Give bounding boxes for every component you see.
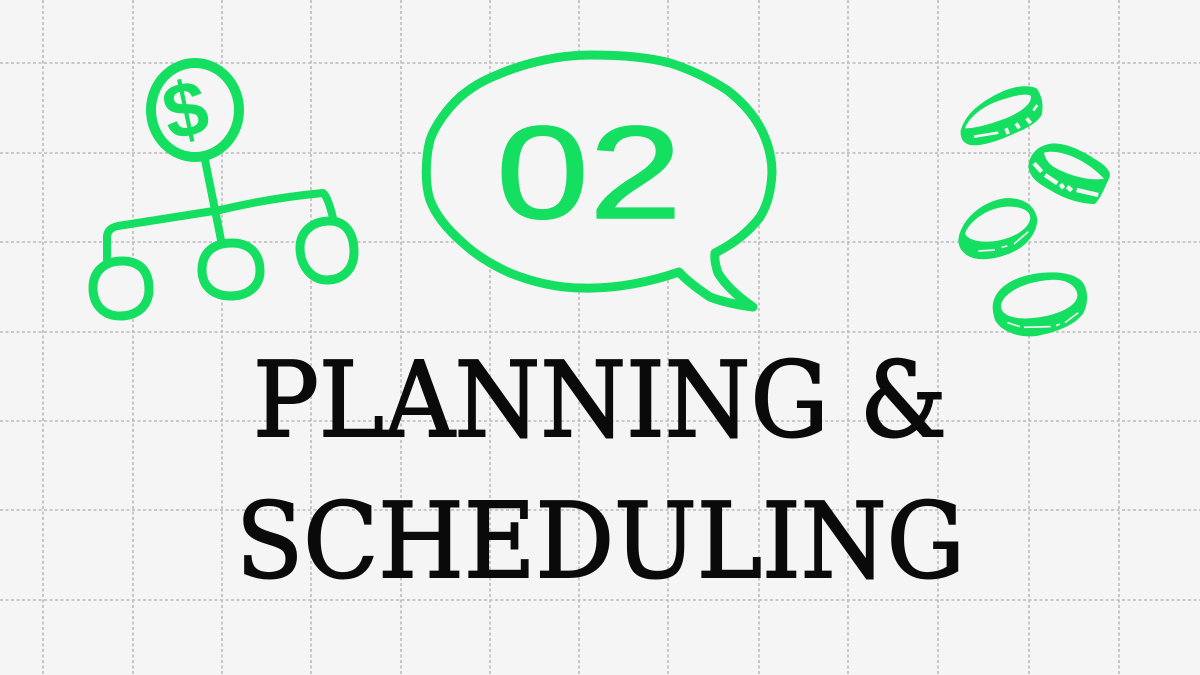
title line 1: PLANNING & bbox=[253, 339, 947, 461]
speech bubble bbox=[426, 55, 772, 307]
icon: left node bbox=[93, 261, 149, 316]
title line 2: SCHEDULING bbox=[236, 480, 965, 602]
coin 3 bbox=[958, 198, 1037, 259]
connector lines bbox=[107, 160, 333, 260]
title bbox=[236, 339, 965, 602]
coin 2 bbox=[1028, 143, 1110, 204]
icon: middle node bbox=[202, 243, 260, 296]
coin 4 bbox=[993, 272, 1087, 336]
icon: coins bbox=[958, 86, 1110, 336]
icon: right node bbox=[300, 221, 354, 280]
number 02: 02 bbox=[496, 99, 682, 246]
icon: dollar circle: $ bbox=[155, 62, 216, 157]
icon: money hierarchy bbox=[93, 62, 354, 316]
icon: dollar circle bbox=[151, 62, 239, 157]
coin 1 bbox=[961, 86, 1043, 145]
